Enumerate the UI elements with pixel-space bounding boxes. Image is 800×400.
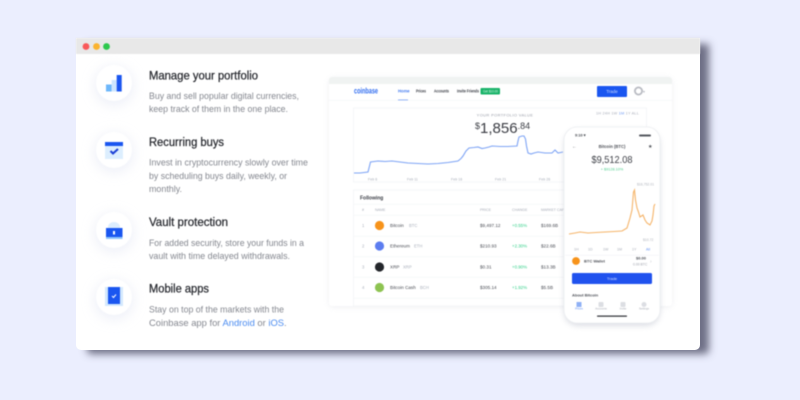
phone mockup xyxy=(564,127,660,326)
row: ethereum: +2.30% xyxy=(512,244,527,248)
row: bitcoin: $169.6B xyxy=(541,223,558,228)
row: xrp: XRP xyxy=(403,264,412,270)
row: bitcoin cash: $305.14 xyxy=(480,285,497,290)
description: vault with time delayed withdrawals. xyxy=(149,250,290,261)
portfolio value: 1,856 xyxy=(480,120,518,137)
row: ethereum: $210.93 xyxy=(480,244,497,248)
description xyxy=(149,90,299,114)
dashboard nav bar: Home xyxy=(398,88,410,94)
portfolio value: $ xyxy=(475,121,480,131)
table header: # xyxy=(362,208,364,212)
dashboard nav bar: ▾ xyxy=(643,89,645,94)
chart date axis: Feb 16 xyxy=(451,178,462,182)
row: bitcoin xyxy=(362,221,558,230)
description: Stay on top of the markets with the xyxy=(149,304,284,314)
icon: phone xyxy=(94,279,134,320)
description: Coinbase app for Android or iOS. xyxy=(149,317,287,328)
chart date axis: Feb 11 xyxy=(407,178,418,182)
phone range tabs: 1H xyxy=(574,248,579,252)
description: For added security, store your funds in a xyxy=(149,237,305,248)
icon: calendar xyxy=(94,132,134,173)
row: bitcoin: 1 xyxy=(362,223,365,228)
row: xrp: XRP xyxy=(390,264,399,270)
dashboard nav bar: Accounts xyxy=(434,88,450,94)
description xyxy=(149,156,308,194)
feature: recurring buys xyxy=(94,132,308,194)
row: bitcoin cash: 4 xyxy=(362,285,365,290)
phone chart: $10.72 xyxy=(643,238,653,242)
phone header: Bitcoin (BTC) xyxy=(599,144,626,149)
phone status bar xyxy=(575,134,651,138)
phone chart: $16,752.01 xyxy=(637,182,654,186)
btc wallet row: BTC Wallet xyxy=(584,258,606,264)
row: xrp: $0.31 xyxy=(480,264,492,270)
feature: vault protection xyxy=(94,212,305,261)
btc wallet row: 0.00 BTC xyxy=(633,262,648,266)
row: bitcoin: $9,497.12 xyxy=(480,223,501,228)
following table: Following xyxy=(360,196,383,202)
dashboard nav bar: Get $10.00 xyxy=(483,90,498,94)
phone header: ★ xyxy=(648,144,653,150)
phone tab bar: Prices xyxy=(575,306,583,310)
feature: mobile apps xyxy=(94,279,287,328)
dashboard nav bar: Prices xyxy=(416,88,427,94)
portfolio value: .84 xyxy=(518,121,530,131)
chart date axis xyxy=(368,178,550,182)
description: Buy and sell popular digital currencies, xyxy=(149,90,299,101)
browser window card xyxy=(76,38,700,350)
row: bitcoin cash: BCH xyxy=(420,285,429,290)
row: xrp: 3 xyxy=(362,264,365,270)
table header: MARKET CAP xyxy=(541,208,565,212)
table header xyxy=(362,208,565,212)
row: bitcoin: +0.55% xyxy=(512,223,527,228)
btc wallet row: $0.00 xyxy=(636,256,647,260)
row: ethereum: 2 xyxy=(362,244,365,248)
table header: PRICE xyxy=(480,208,492,212)
icon: bar chart xyxy=(94,65,134,106)
dashboard nav bar: Trade xyxy=(606,89,618,94)
btc wallet row xyxy=(572,256,652,266)
dashboard screenshot xyxy=(329,77,672,307)
dashboard nav bar xyxy=(354,86,645,100)
row: xrp xyxy=(362,262,556,272)
row: ethereum xyxy=(362,241,556,251)
description: Invest in cryptocurrency slowly over time xyxy=(149,156,308,168)
heading: Recurring buys xyxy=(149,135,224,149)
heading: Mobile apps xyxy=(149,282,209,296)
row: xrp: $13.3B xyxy=(541,264,556,270)
time range tabs: 1H 24H 1W 1M 1Y ALL xyxy=(596,112,639,116)
phone range tabs: All xyxy=(646,248,650,252)
icon: padlock xyxy=(94,212,134,253)
chart date axis: Feb 26 xyxy=(539,178,550,182)
phone range tabs: 1M xyxy=(617,248,622,252)
phone tab bar: Accounts xyxy=(595,306,607,310)
heading: Vault protection xyxy=(149,215,228,229)
row: bitcoin cash: Bitcoin Cash xyxy=(390,285,416,290)
feature: manage your portfolio xyxy=(94,65,299,114)
window title bar xyxy=(76,38,700,54)
phone home bar xyxy=(597,316,627,317)
table header: CHANGE xyxy=(512,208,528,212)
phone header xyxy=(572,144,653,150)
phone header: ← xyxy=(572,144,577,150)
dashboard nav bar: coinbase xyxy=(354,86,378,96)
row: xrp: +0.90% xyxy=(512,264,527,270)
chart date axis: Feb 6 xyxy=(368,178,377,182)
phone range tabs: 1Y xyxy=(632,248,637,252)
phone price: $9,512.08 xyxy=(592,154,633,166)
phone price change: + $9128.10% xyxy=(601,168,624,172)
heading: Manage your portfolio xyxy=(149,68,258,82)
phone trade button: Trade xyxy=(607,276,618,281)
phone tab bar xyxy=(575,302,650,310)
phone chart xyxy=(569,182,655,242)
portfolio chart panel xyxy=(354,108,646,182)
row: bitcoin cash: $5.5B xyxy=(541,285,553,290)
row: ethereum: ETH xyxy=(414,244,422,248)
row: bitcoin cash: +1.92% xyxy=(512,285,527,290)
phone status bar: 9:10 ▾ xyxy=(575,134,587,138)
description xyxy=(149,237,305,261)
description: by scheduling buys daily, weekly, or xyxy=(149,170,287,181)
row: bitcoin: Bitcoin xyxy=(390,223,404,228)
phone range tabs: 1W xyxy=(603,248,609,252)
phone range tabs: 1D xyxy=(588,248,593,252)
row: ethereum: $22.6B xyxy=(541,244,556,248)
line chart xyxy=(354,136,563,173)
row: ethereum: Ethereum xyxy=(390,244,410,248)
row: bitcoin: BTC xyxy=(409,223,417,228)
portfolio chart panel: YOUR PORTFOLIO VALUE xyxy=(477,112,533,118)
phone range tabs xyxy=(565,248,659,256)
about bitcoin label: About Bitcoin xyxy=(572,292,599,298)
phone tab bar: Settings xyxy=(639,306,650,310)
btc wallet row: › xyxy=(650,259,652,265)
following table xyxy=(354,190,646,306)
description: keep track of them in the one place. xyxy=(149,103,288,114)
phone trade button xyxy=(572,273,652,284)
description: monthly. xyxy=(149,183,182,194)
dashboard nav bar: Invite Friends xyxy=(457,88,480,94)
table header: NAME xyxy=(375,208,386,212)
phone tab bar: Invite xyxy=(620,306,627,310)
row: bitcoin cash xyxy=(362,283,553,292)
chart date axis: Feb 21 xyxy=(495,178,506,182)
description xyxy=(149,304,287,328)
